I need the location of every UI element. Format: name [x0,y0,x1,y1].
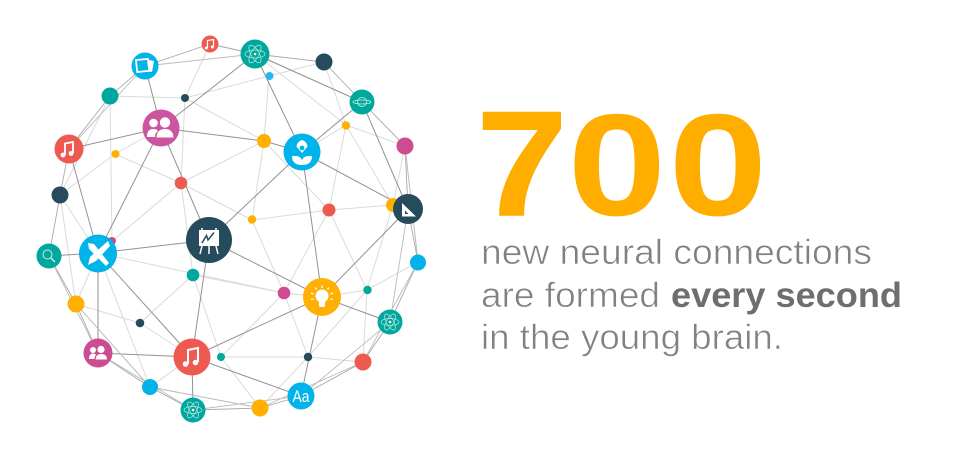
description text: every second [671,276,902,315]
description text: new neural connections [481,233,872,272]
icon: crossed tools [79,234,117,272]
icon: magnifier [36,244,62,268]
icon: people small [84,338,112,368]
icon: light bulb [303,278,341,316]
icon: small music note [202,36,218,52]
icon: music note bottom [174,338,210,376]
description text: are formed [481,276,660,315]
description text [481,233,902,357]
icon: planet [350,90,374,114]
icon: typography [288,382,314,410]
icon: atom right [378,310,402,334]
icon: atom top [240,40,270,68]
outer rim connections [49,44,418,410]
icon: people [142,110,180,146]
icon: easel [186,217,232,263]
big number 700 [477,81,767,247]
network nodes [52,54,426,416]
big number 700: 0 [568,84,666,246]
icon: flower [284,134,320,170]
dark network connections [49,54,408,410]
icon: photos [132,52,158,80]
icon: typography: Aa [292,387,310,406]
icon: set square [393,194,423,224]
light network connections [60,44,418,408]
big number 700: 7 [477,81,567,247]
icon: atom bottom [180,398,206,422]
big number 700: 0 [668,84,767,246]
icon: large music note [54,134,84,164]
description text: in the young brain. [481,318,783,357]
